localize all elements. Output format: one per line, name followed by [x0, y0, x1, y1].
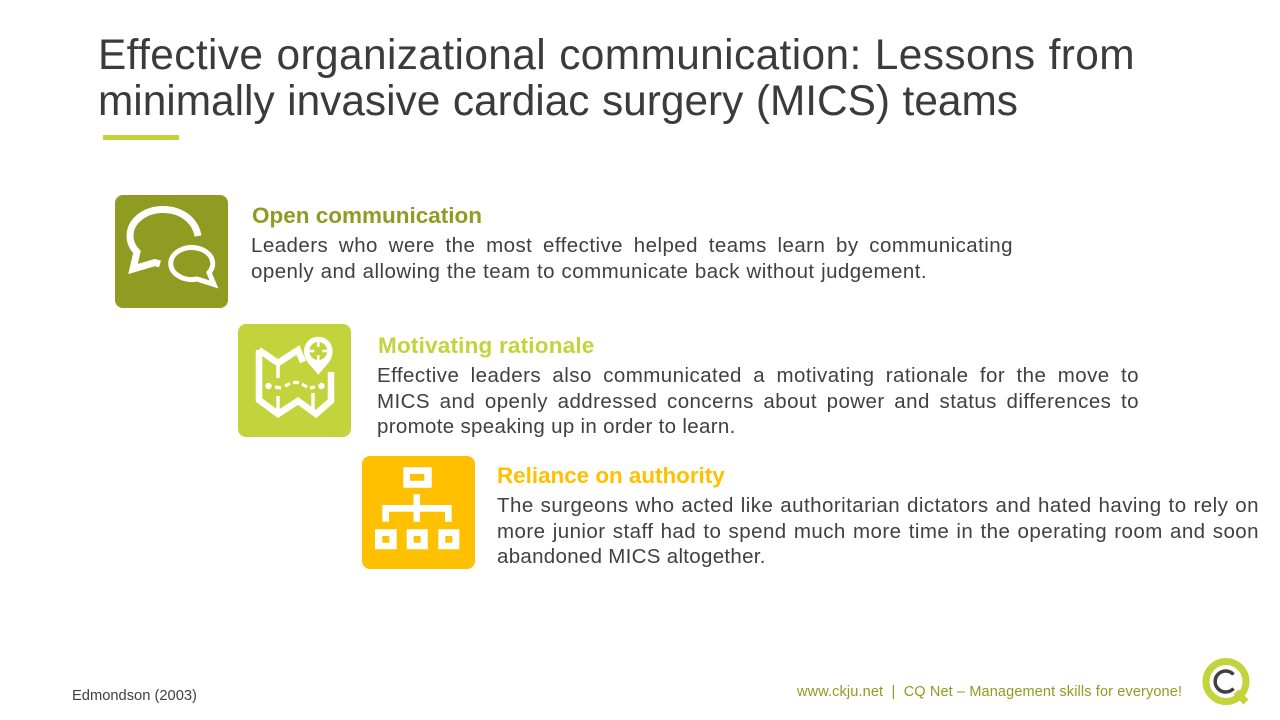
text: open communication — [251, 234, 1013, 283]
title: Effective organizational communication: Lessons from — [98, 31, 1135, 78]
icon: speech bubbles — [115, 195, 228, 308]
heading: motivating rationale: Motivating rationale — [378, 332, 595, 358]
source citation: Edmondson (2003) — [72, 688, 197, 704]
text: reliance on authority: The surgeons who acted like authoritarian dictators and hated having to rely on — [497, 494, 1259, 517]
title — [98, 31, 1135, 124]
title accent bar — [103, 135, 179, 140]
text: open communication: Leaders who were the most effective helped teams learn by communicating — [251, 234, 1013, 257]
text: motivating rationale: Effective leaders also communicated a motivating rationale for the move to — [377, 364, 1139, 387]
icon: organization chart — [362, 456, 475, 569]
text: motivating rationale — [377, 364, 1139, 438]
text: motivating rationale: MICS and openly addressed concerns about power and status differences to — [377, 390, 1139, 413]
text: reliance on authority: abandoned MICS altogether. — [497, 545, 766, 568]
heading: open communication: Open communication — [252, 202, 482, 228]
heading: reliance on authority: Reliance on authority — [497, 462, 725, 488]
icon: map with location pin — [238, 324, 351, 437]
text: motivating rationale: promote speaking up in order to learn. — [377, 415, 736, 438]
text: reliance on authority — [497, 494, 1259, 568]
logo: CQ — [1202, 658, 1250, 705]
title: minimally invasive cardiac surgery (MICS) teams — [98, 77, 1018, 124]
text: open communication: openly and allowing the team to communicate back without judgement. — [251, 260, 927, 283]
text: reliance on authority: more junior staff had to spend much more time in the operating room and soon — [497, 520, 1259, 543]
footer tagline: www.ckju.net | CQ Net – Management skills for everyone! — [797, 684, 1182, 700]
